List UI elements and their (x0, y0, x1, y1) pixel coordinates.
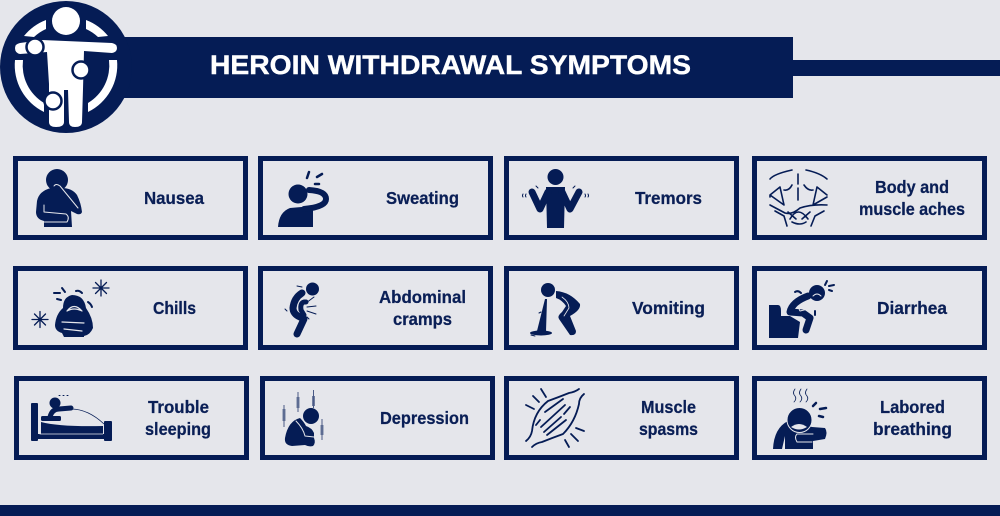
icon: body pain figure (0, 1, 132, 133)
icon: labored breathing (773, 389, 826, 449)
icon: abdominal cramps (285, 282, 319, 334)
label (639, 397, 698, 439)
panel: diarrhea (754, 268, 984, 348)
label: Depression (380, 408, 469, 428)
label (379, 287, 466, 329)
label: Abdominal (379, 287, 466, 307)
label: breathing (873, 419, 952, 439)
icon: chills (32, 280, 109, 337)
panel: labored breathing (754, 378, 984, 458)
label: sleeping (145, 419, 211, 439)
label: Labored (880, 397, 945, 417)
panel: nausea (16, 158, 246, 238)
icon: nausea (36, 169, 82, 227)
icon: vomiting (530, 283, 580, 336)
panel: abdominal cramps (260, 268, 490, 348)
label: muscle aches (859, 199, 965, 219)
icon: sweating (278, 172, 326, 227)
label: Chills (153, 298, 196, 318)
panel: vomiting (506, 268, 736, 348)
panel: muscle spasms (506, 378, 736, 458)
label: Muscle (641, 397, 696, 417)
panel: tremors (506, 158, 736, 238)
label: Diarrhea (877, 298, 947, 318)
label: Vomiting (632, 298, 705, 318)
panel: sweating (260, 158, 490, 238)
title: HEROIN WITHDRAWAL SYMPTOMS (210, 50, 691, 80)
label: Body and (875, 177, 949, 197)
footer bar (0, 505, 1000, 516)
label (859, 177, 965, 219)
panel: body and muscle aches (754, 158, 984, 238)
icon: diarrhea (769, 281, 834, 338)
label (873, 397, 952, 439)
panel: depression (262, 378, 492, 458)
icon: back pain (770, 170, 827, 226)
label: spasms (639, 419, 698, 439)
icon: bed (31, 396, 112, 441)
label: Nausea (144, 188, 204, 208)
panel: trouble sleeping (16, 378, 246, 458)
label: Sweating (386, 188, 459, 208)
icon: tremors (522, 169, 588, 228)
panel: chills (16, 268, 246, 348)
icon: depression (284, 390, 322, 446)
label: Trouble (148, 397, 209, 417)
label (145, 397, 211, 439)
label: Tremors (635, 188, 702, 208)
header band (110, 37, 1000, 98)
label: cramps (393, 309, 452, 329)
icon: muscle (526, 389, 584, 447)
